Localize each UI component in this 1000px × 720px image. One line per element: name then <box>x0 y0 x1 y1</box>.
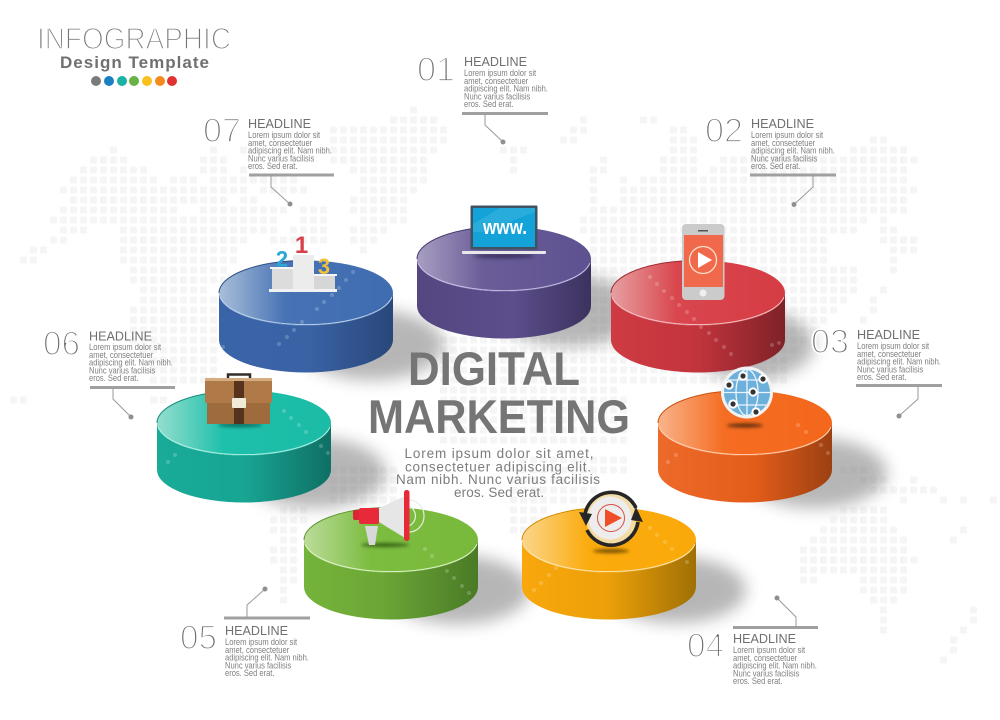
text block 03: Lorem ipsum dolor sit <box>857 340 930 351</box>
text block 04: HEADLINE <box>733 631 796 646</box>
text block 02: HEADLINE <box>751 116 814 131</box>
text block 07: 07 <box>203 112 241 150</box>
text block 05: eros. Sed erat. <box>225 668 275 678</box>
text block 04: Lorem ipsum dolor sit <box>733 644 806 655</box>
text block 06 <box>43 325 175 420</box>
text block 06: Nunc varius facilisis <box>89 365 155 376</box>
central body text: consectetuer adipiscing elit. <box>405 460 591 474</box>
text block 04 <box>687 596 818 686</box>
text block 01: adipiscing elit. Nam nibh. <box>464 83 548 94</box>
icon: smartphone play <box>682 224 724 300</box>
heading: marketing: MARKETING <box>368 390 630 443</box>
title: infographic: INFOGRAPHIC <box>37 21 231 56</box>
icon: podium with ranks: 3 <box>318 254 330 279</box>
icon: refresh play <box>579 492 643 553</box>
text block 07: eros. Sed erat. <box>248 161 298 171</box>
icon: podium with ranks: 2 <box>276 246 288 272</box>
text block 04: 04 <box>687 627 724 665</box>
text block 01: Lorem ipsum dolor sit <box>464 67 537 78</box>
cylinder 07: blue <box>219 260 393 372</box>
text block 02: amet, consectetuer <box>751 137 815 148</box>
cylinder 06: teal <box>157 390 331 502</box>
text block 06: amet, consectetuer <box>89 349 153 360</box>
subtitle: design template: Design Template <box>60 53 209 72</box>
icon: laptop www: www. <box>482 217 527 239</box>
text block 04: eros. Sed erat. <box>733 676 783 686</box>
cylinder 05: green <box>304 508 478 619</box>
text block 01: eros. Sed erat. <box>464 99 514 109</box>
cylinder 04: yellow <box>522 508 696 620</box>
text block 05: amet, consectetuer <box>225 644 289 655</box>
text block 03: Nunc varius facilisis <box>857 364 923 375</box>
text block 05: Lorem ipsum dolor sit <box>225 636 298 647</box>
text block 02: eros. Sed erat. <box>751 161 801 171</box>
text block 07: amet, consectetuer <box>248 137 312 148</box>
text block 05: Nunc varius facilisis <box>225 660 291 671</box>
text block 01: Nunc varius facilisis <box>464 91 530 102</box>
cylinder 01: purple <box>417 226 591 338</box>
text block 01: HEADLINE <box>464 54 527 69</box>
icon: megaphone <box>353 490 424 547</box>
text block 06: 06 <box>43 325 80 363</box>
text block 03: eros. Sed erat. <box>857 372 907 382</box>
text block 07: Lorem ipsum dolor sit <box>248 129 321 140</box>
text block 03 <box>811 323 942 418</box>
text block 07: HEADLINE <box>248 116 311 131</box>
text block 01: amet, consectetuer <box>464 75 528 86</box>
heading: digital: DIGITAL <box>408 342 580 395</box>
title block <box>37 21 231 86</box>
central body text: eros. Sed erat. <box>454 485 544 500</box>
text block 03: amet, consectetuer <box>857 348 921 359</box>
text block 02: Nunc varius facilisis <box>751 153 817 164</box>
icon: globe network <box>721 366 773 428</box>
text block 05: 05 <box>180 619 217 657</box>
text block 07 <box>203 112 334 206</box>
text block 03: adipiscing elit. Nam nibh. <box>857 356 941 367</box>
icon: laptop www <box>462 206 546 258</box>
text block 05 <box>180 586 310 678</box>
cylinder shadows <box>242 276 887 624</box>
central title <box>368 342 630 500</box>
text block 03: 03 <box>811 323 849 361</box>
text block 02: Lorem ipsum dolor sit <box>751 129 824 140</box>
text block 04: Nunc varius facilisis <box>733 668 799 679</box>
text block 02: 02 <box>705 112 743 150</box>
text block 06: eros. Sed erat. <box>89 373 139 383</box>
text block 06: HEADLINE <box>89 328 152 344</box>
text block 02: adipiscing elit. Nam nibh. <box>751 145 835 156</box>
text block 06: adipiscing elit. Nam nibh. <box>89 357 173 368</box>
central body text: Nam nibh. Nunc varius facilisis <box>396 472 600 487</box>
text block 05: HEADLINE <box>225 623 288 638</box>
cylinder 03: orange <box>658 390 832 502</box>
world map dot pattern <box>8 105 998 665</box>
text block 07: adipiscing elit. Nam nibh. <box>248 145 332 156</box>
icon: podium with ranks: 1 <box>295 232 308 259</box>
text block 04: adipiscing elit. Nam nibh. <box>733 660 817 671</box>
icon: briefcase <box>205 374 272 427</box>
text block 06: Lorem ipsum dolor sit <box>89 341 162 352</box>
text block 07: Nunc varius facilisis <box>248 153 314 164</box>
text block 01 <box>417 51 548 144</box>
text block 02 <box>705 112 836 207</box>
text block 04: amet, consectetuer <box>733 652 797 663</box>
text block 05: adipiscing elit. Nam nibh. <box>225 652 309 663</box>
cylinder 02: red <box>611 260 785 372</box>
text block 03: HEADLINE <box>857 327 920 342</box>
central body text: Lorem ipsum dolor sit amet, <box>404 446 594 461</box>
text block 01: 01 <box>417 51 455 89</box>
icon: podium with ranks <box>269 232 337 292</box>
colour dots <box>91 76 177 86</box>
